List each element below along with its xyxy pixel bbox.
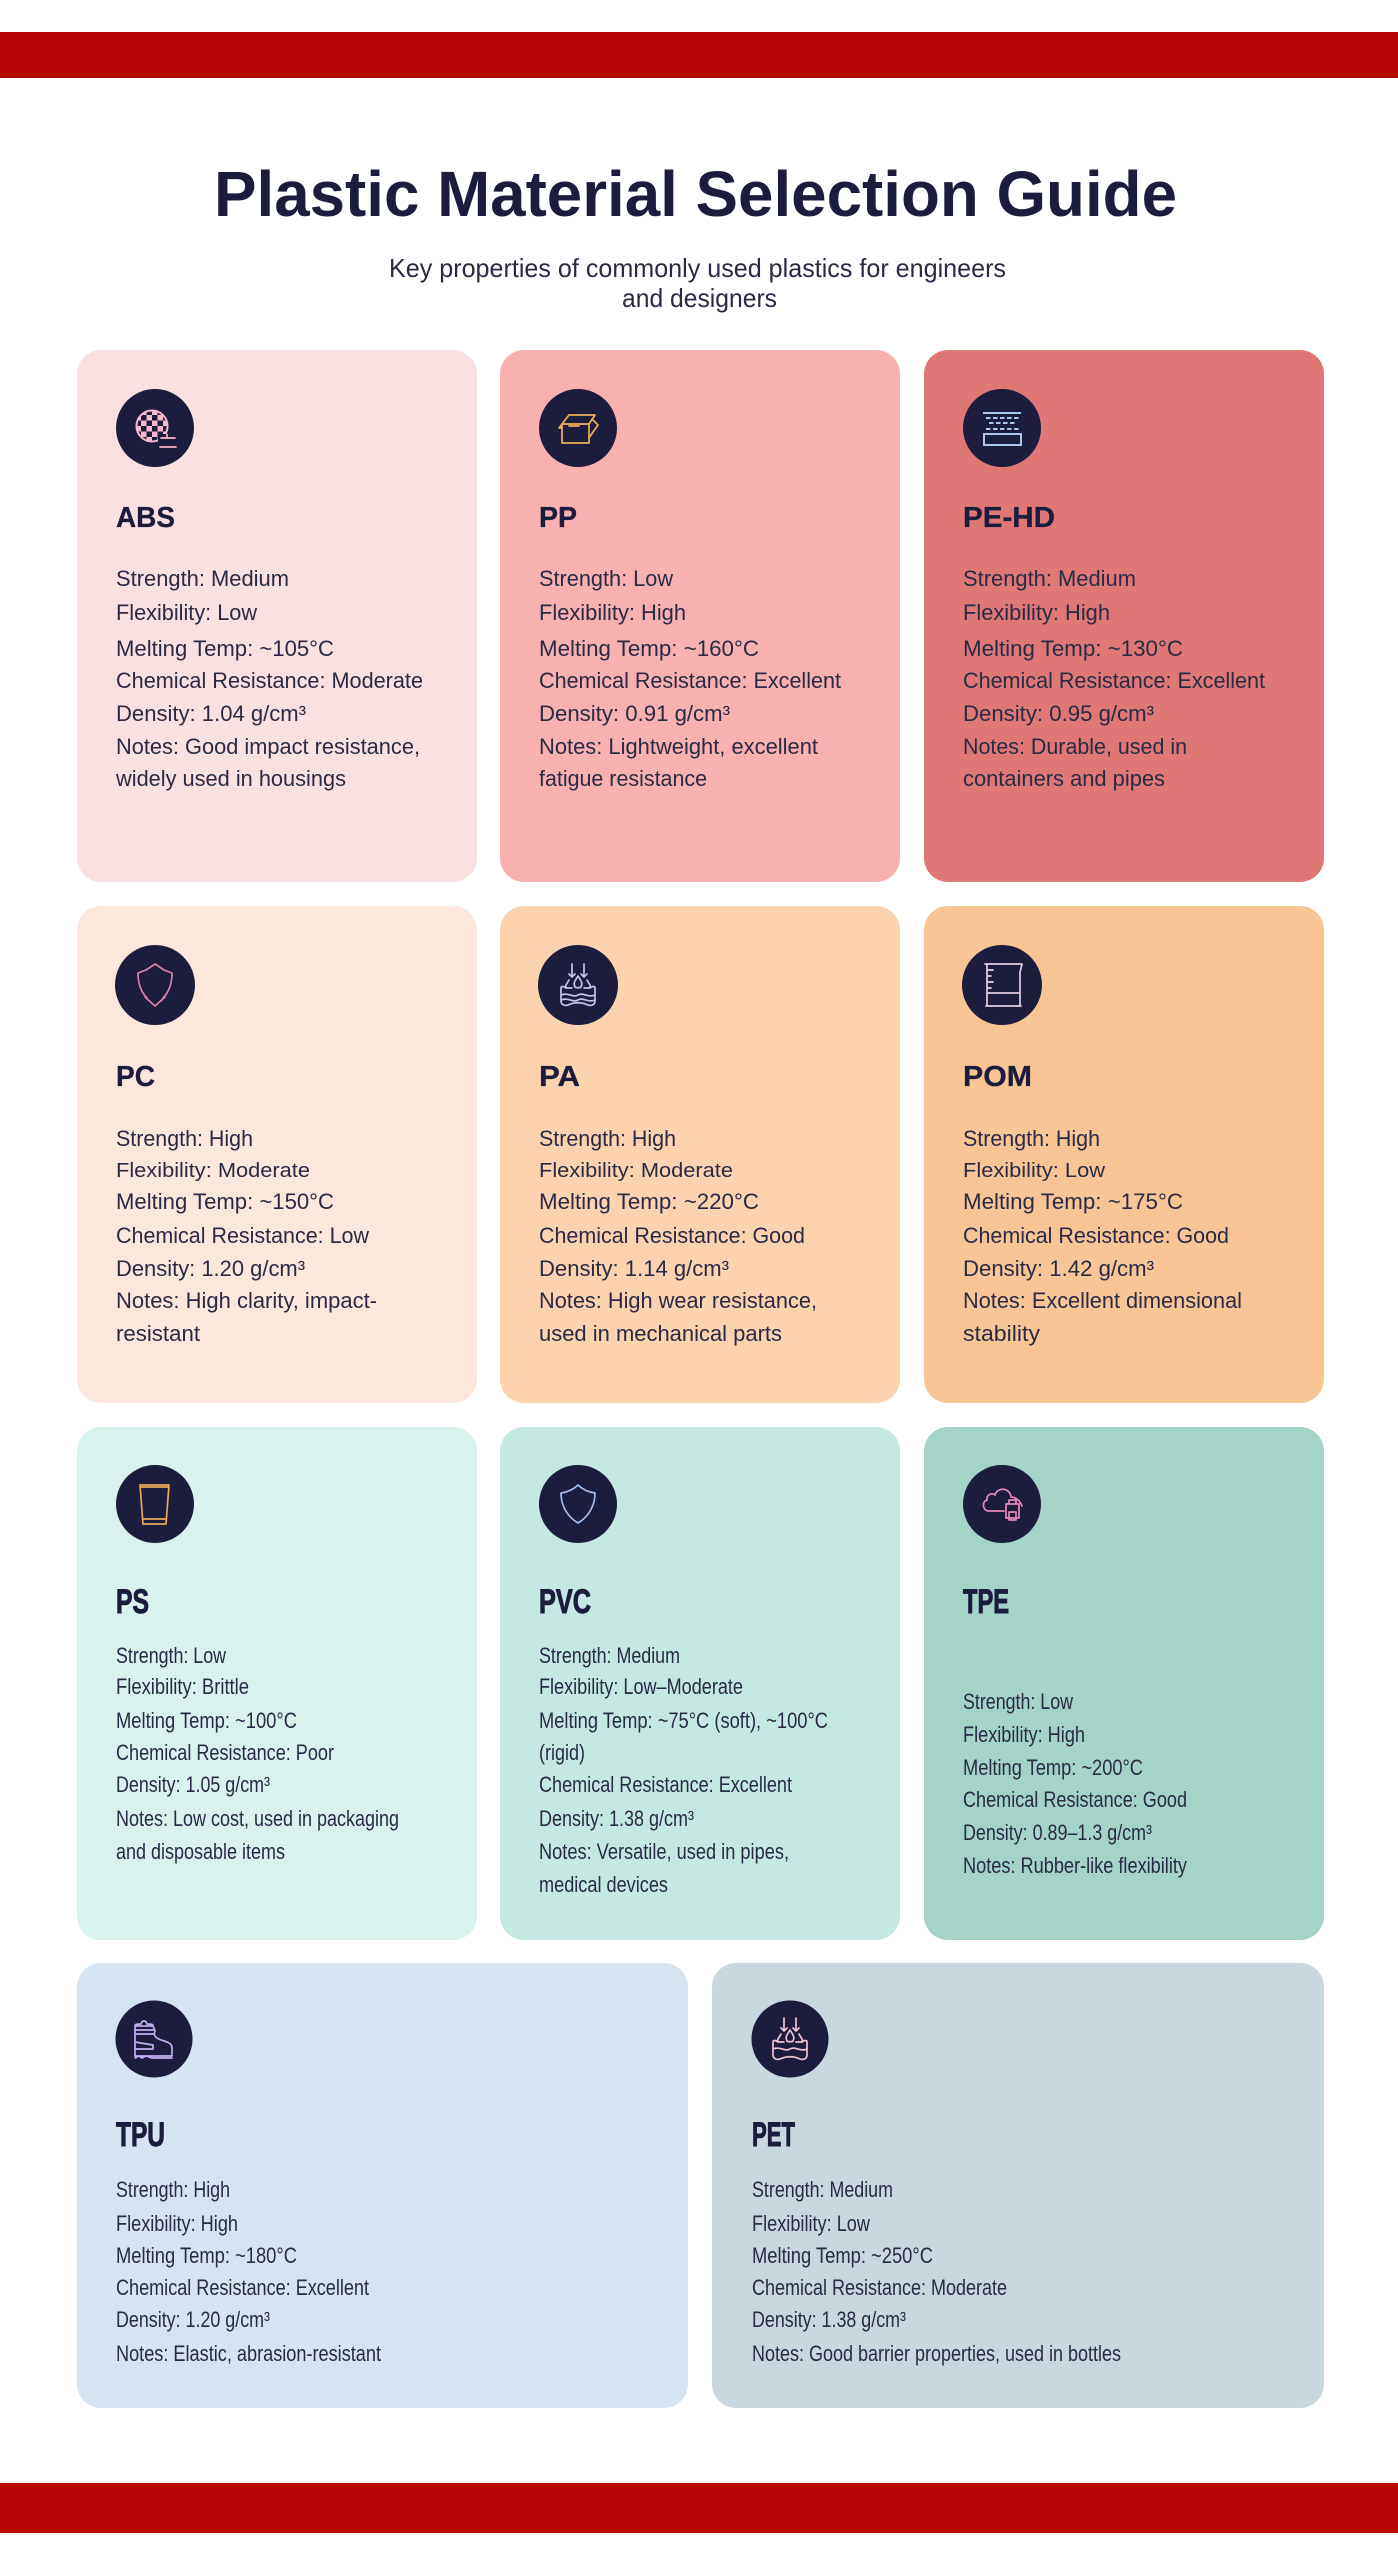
text block: PE-HD properties: Strength: Medium bbox=[963, 566, 1136, 591]
text block: PC properties: resistant bbox=[116, 1321, 200, 1346]
text block: TPE properties: Chemical Resistance: Good bbox=[963, 1787, 1187, 1812]
text block: PC properties: Density: 1.20 g/cm³ bbox=[116, 1256, 305, 1281]
panel: TPE bbox=[924, 1427, 1324, 1940]
bottom red bar bbox=[0, 2483, 1398, 2533]
panel: PE-HD bbox=[924, 350, 1324, 882]
text block: PS properties: Density: 1.05 g/cm³ bbox=[116, 1772, 270, 1797]
heading: PS: PS bbox=[116, 1583, 149, 1621]
text block: ABS properties: Density: 1.04 g/cm³ bbox=[116, 701, 306, 726]
panel: PVC bbox=[500, 1427, 900, 1940]
text block: PVC properties: Notes: Versatile, used in pipes, bbox=[539, 1839, 789, 1864]
text block: PS properties: and disposable items bbox=[116, 1839, 285, 1864]
text block: PS properties bbox=[116, 1643, 399, 1864]
text block: PVC properties: Chemical Resistance: Excellent bbox=[539, 1772, 792, 1797]
heading: PA: PA bbox=[539, 1061, 580, 1093]
text block: ABS properties bbox=[115, 566, 423, 791]
heading: POM: POM bbox=[963, 1061, 1032, 1093]
subtitle: Key properties of commonly used plastics for engineers bbox=[389, 253, 1006, 283]
text block: PP properties: Flexibility: High bbox=[539, 600, 686, 625]
text block: TPE properties: Melting Temp: ~200°C bbox=[963, 1755, 1143, 1780]
text block: TPU properties: Chemical Resistance: Excellent bbox=[116, 2275, 369, 2300]
text block: TPU properties: Melting Temp: ~180°C bbox=[116, 2243, 297, 2268]
subtitle: and designers bbox=[622, 283, 777, 313]
text block: PS properties: Notes: Low cost, used in packaging bbox=[116, 1806, 399, 1831]
text block: PC properties: Chemical Resistance: Low bbox=[116, 1223, 369, 1248]
text block: PC properties: Strength: High bbox=[116, 1126, 253, 1151]
text block: PA properties: Chemical Resistance: Good bbox=[539, 1223, 805, 1248]
text block: PET properties: Flexibility: Low bbox=[752, 2211, 870, 2236]
heading: TPE: TPE bbox=[963, 1583, 1009, 1621]
text block: ABS properties: widely used in housings bbox=[115, 766, 346, 791]
text block: PS properties: Strength: Low bbox=[116, 1643, 226, 1668]
text block: PET properties bbox=[752, 2177, 1121, 2366]
text block: ABS properties: Notes: Good impact resistance, bbox=[116, 734, 420, 759]
text block: PET properties: Density: 1.38 g/cm³ bbox=[752, 2307, 906, 2332]
text block: PET properties: Chemical Resistance: Moderate bbox=[752, 2275, 1007, 2300]
text block: PP properties: Notes: Lightweight, excellent bbox=[539, 734, 818, 759]
text block: POM properties: Density: 1.42 g/cm³ bbox=[963, 1256, 1154, 1281]
text block: PE-HD properties: Melting Temp: ~130°C bbox=[963, 636, 1183, 661]
text block: PC properties: Flexibility: Moderate bbox=[116, 1160, 310, 1182]
text block: ABS properties: Strength: Medium bbox=[116, 566, 289, 591]
icon: moisture absorption bbox=[538, 945, 618, 1025]
text block: PP properties: Density: 0.91 g/cm³ bbox=[539, 701, 730, 726]
text block: PET properties: Melting Temp: ~250°C bbox=[752, 2243, 933, 2268]
icon: beaker bbox=[962, 945, 1042, 1025]
text block: PE-HD properties: Notes: Durable, used in bbox=[963, 734, 1187, 759]
text block: POM properties: Flexibility: Low bbox=[963, 1160, 1106, 1182]
text block: ABS properties: Chemical Resistance: Moderate bbox=[116, 668, 423, 693]
text block: TPU properties: Strength: High bbox=[116, 2177, 230, 2202]
top red bar bbox=[0, 32, 1398, 78]
text block: POM properties: stability bbox=[963, 1321, 1040, 1346]
icon: box bbox=[539, 389, 617, 467]
heading: PC: PC bbox=[116, 1061, 155, 1093]
text block: TPU properties bbox=[116, 2177, 381, 2366]
text block: PVC properties: Strength: Medium bbox=[539, 1643, 680, 1668]
text block: ABS properties: Melting Temp: ~105°C bbox=[116, 636, 334, 661]
icon: moisture absorption bbox=[752, 2000, 828, 2078]
icon: shield bbox=[115, 945, 195, 1025]
text block: PVC properties: Density: 1.38 g/cm³ bbox=[539, 1806, 694, 1831]
heading: PP: PP bbox=[539, 502, 577, 534]
icon: cup bbox=[116, 1465, 194, 1543]
text block: PE-HD properties: Density: 0.95 g/cm³ bbox=[963, 701, 1154, 726]
text block: POM properties bbox=[963, 1126, 1242, 1346]
text block: POM properties: Chemical Resistance: Good bbox=[963, 1223, 1229, 1248]
text block: PC properties: Melting Temp: ~150°C bbox=[116, 1189, 334, 1214]
panel: TPU bbox=[77, 1963, 688, 2408]
text block: PET properties: Notes: Good barrier properties, used in bottles bbox=[752, 2341, 1121, 2366]
icon: shield bbox=[539, 1465, 617, 1543]
text block: POM properties: Notes: Excellent dimensional bbox=[963, 1288, 1242, 1313]
text block: PA properties: Flexibility: Moderate bbox=[539, 1160, 733, 1182]
text block: PS properties: Melting Temp: ~100°C bbox=[116, 1708, 297, 1733]
text block: PS properties: Flexibility: Brittle bbox=[116, 1674, 249, 1699]
heading: PET: PET bbox=[752, 2116, 795, 2154]
icon: boot bbox=[116, 2000, 192, 2078]
text block: PP properties: fatigue resistance bbox=[539, 766, 707, 791]
text block: TPE properties bbox=[963, 1689, 1187, 1878]
panel: POM bbox=[924, 906, 1324, 1403]
text block: PVC properties bbox=[539, 1643, 828, 1897]
text block: PVC properties: Melting Temp: ~75°C (soft), ~100°C bbox=[539, 1708, 828, 1733]
title: Plastic Material Selection Guide bbox=[214, 158, 1177, 230]
text block: PVC properties: (rigid) bbox=[539, 1740, 585, 1765]
subtitle bbox=[389, 253, 1006, 313]
text block: PET properties: Strength: Medium bbox=[752, 2177, 893, 2202]
panel: PC bbox=[77, 906, 477, 1403]
text block: PP properties: Strength: Low bbox=[539, 566, 673, 591]
heading: ABS: ABS bbox=[116, 502, 175, 534]
text block: PA properties: Melting Temp: ~220°C bbox=[539, 1189, 759, 1214]
heading: TPU: TPU bbox=[116, 2116, 165, 2154]
text block: TPE properties: Flexibility: High bbox=[963, 1722, 1085, 1747]
panel: PS bbox=[77, 1427, 477, 1940]
heading: PVC: PVC bbox=[539, 1583, 591, 1621]
text block: PA properties: Density: 1.14 g/cm³ bbox=[539, 1256, 729, 1281]
icon: checkered disc bbox=[116, 389, 194, 467]
text block: PS properties: Chemical Resistance: Poor bbox=[116, 1740, 334, 1765]
text block: TPU properties: Density: 1.20 g/cm³ bbox=[116, 2307, 270, 2332]
text block: PE-HD properties: Chemical Resistance: Excellent bbox=[963, 668, 1265, 693]
panel: PA bbox=[500, 906, 900, 1403]
text block: TPE properties: Strength: Low bbox=[963, 1689, 1073, 1714]
text block: PA properties bbox=[539, 1126, 817, 1346]
heading: PE-HD: PE-HD bbox=[963, 502, 1055, 534]
text block: PP properties: Melting Temp: ~160°C bbox=[539, 636, 759, 661]
text block: TPE properties: Notes: Rubber-like flexibility bbox=[963, 1853, 1187, 1878]
text block: PA properties: used in mechanical parts bbox=[539, 1321, 782, 1346]
text block: TPU properties: Flexibility: High bbox=[116, 2211, 238, 2236]
panel: PP bbox=[500, 350, 900, 882]
panel: PET bbox=[712, 1963, 1324, 2408]
text block: PP properties: Chemical Resistance: Excellent bbox=[539, 668, 841, 693]
text block: PA properties: Notes: High wear resistance, bbox=[539, 1288, 817, 1313]
text block: ABS properties: Flexibility: Low bbox=[116, 600, 257, 625]
text block: PE-HD properties bbox=[963, 566, 1265, 791]
text block: POM properties: Melting Temp: ~175°C bbox=[963, 1189, 1183, 1214]
text block: PC properties bbox=[116, 1126, 377, 1346]
text block: TPU properties: Notes: Elastic, abrasion-resistant bbox=[116, 2341, 381, 2366]
text block: TPE properties: Density: 0.89–1.3 g/cm³ bbox=[963, 1820, 1152, 1845]
text block: PVC properties: Flexibility: Low–Moderate bbox=[539, 1674, 743, 1699]
text block: POM properties: Strength: High bbox=[963, 1126, 1100, 1151]
text block: PA properties: Strength: High bbox=[539, 1126, 676, 1151]
text block: PP properties bbox=[539, 566, 841, 791]
icon: filter layers bbox=[963, 389, 1041, 467]
text block: PC properties: Notes: High clarity, impact- bbox=[116, 1288, 377, 1313]
text block: PVC properties: medical devices bbox=[539, 1872, 668, 1897]
panel: ABS bbox=[77, 350, 477, 882]
icon: cloud printer bbox=[963, 1465, 1041, 1543]
text block: PE-HD properties: containers and pipes bbox=[963, 766, 1165, 791]
text block: PE-HD properties: Flexibility: High bbox=[963, 600, 1110, 625]
